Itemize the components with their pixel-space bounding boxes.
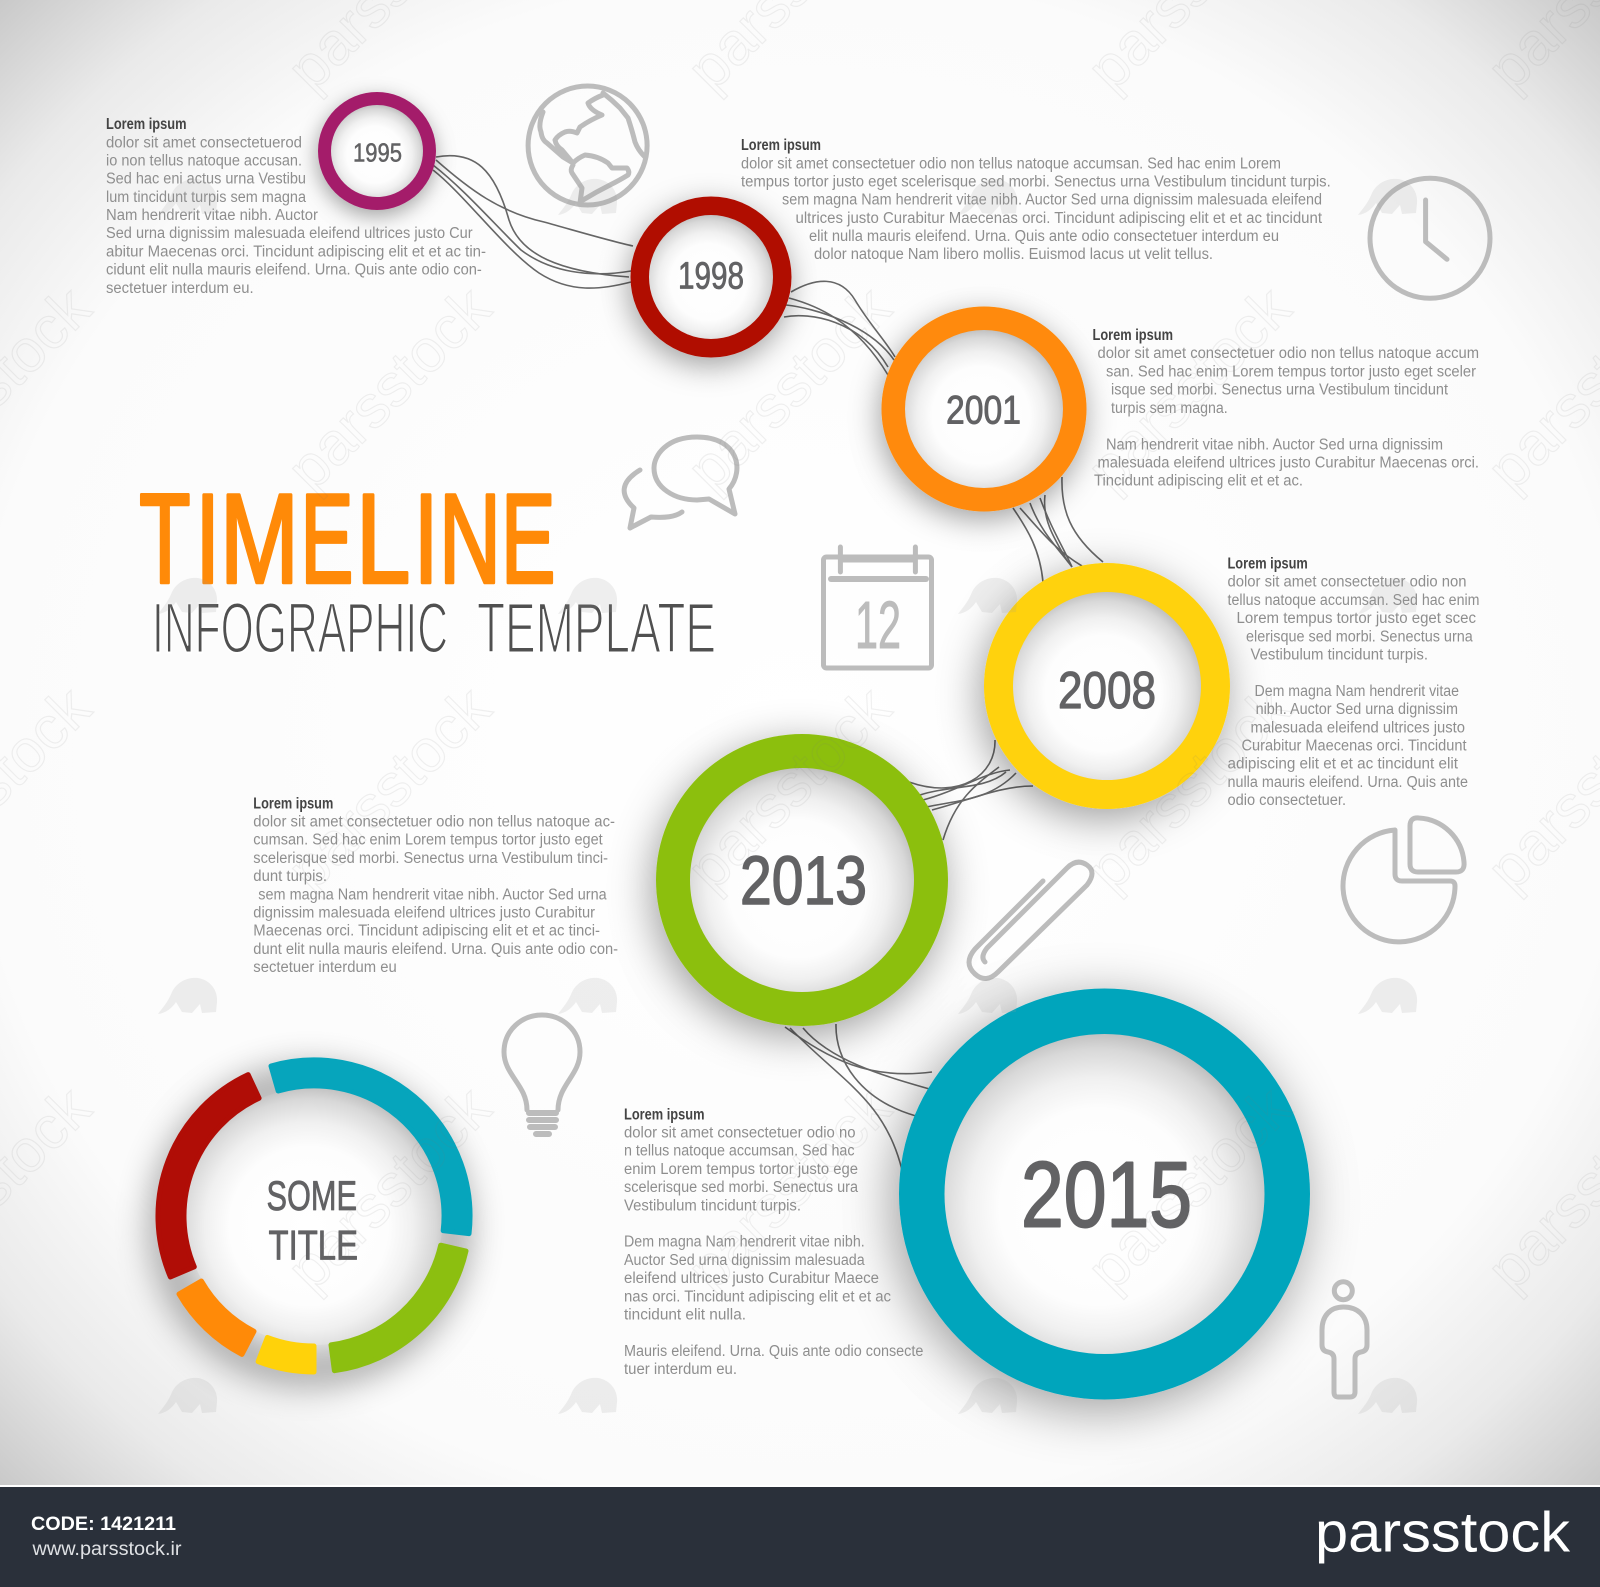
watermark: parsstock	[274, 1073, 504, 1303]
donut label: SOME	[266, 1172, 357, 1219]
text block 1995: Lorem ipsum	[106, 116, 186, 133]
lines 2008 to 2013	[909, 740, 1033, 840]
segment: teal	[271, 1060, 470, 1234]
text block 2008: adipiscing elit et et ac tincidunt elit	[1228, 756, 1459, 773]
title: I	[414, 467, 438, 609]
subtitle: INFOGRAPHIC	[152, 590, 448, 668]
watermark: parsstock	[674, 1073, 904, 1303]
footer website: www.parsstock.ir	[31, 1539, 182, 1560]
text block 2015: Auctor Sed urna dignissim malesuada	[624, 1252, 865, 1269]
text block 2001: Nam hendrerit vitae nibh. Auctor Sed urna dignissim	[1106, 436, 1443, 453]
text block 1998: dolor natoque Nam libero mollis. Euismod lacus ut velit tellus.	[814, 246, 1213, 263]
text block 1995: Sed hac eni actus urna Vestibu	[106, 171, 306, 188]
text block 2013: scelerisque sed morbi. Senectus urna Vestibulum tinci-	[253, 850, 608, 867]
text block 2008: Lorem ipsum	[1228, 556, 1308, 572]
text block 1998	[741, 137, 1331, 263]
text block 1998: ultrices justo Curabitur Maecenas orci. Tincidunt adipiscing elit et et ac tincidunt	[796, 210, 1323, 227]
footer bar	[0, 1485, 1600, 1587]
text block 2013: sem magna Nam hendrerit vitae nibh. Auctor Sed urna	[258, 886, 607, 903]
watermark: parsstock	[274, 273, 504, 503]
watermark: parsstock	[1074, 673, 1304, 903]
segment: yellow	[258, 1337, 314, 1372]
text block 2015: Vestibulum tincidunt turpis.	[624, 1197, 801, 1214]
donut inner hole	[185, 1087, 443, 1345]
text block 2008: nulla mauris eleifend. Urna. Quis ante	[1228, 774, 1468, 791]
text block 2008: Curabitur Maecenas orci. Tincidunt	[1242, 738, 1467, 754]
text block 2008: odio consectetuer.	[1228, 792, 1346, 809]
lines 1995 to 1998	[433, 156, 633, 288]
text block 2008: tellus natoque accumsan. Sed hac enim	[1228, 592, 1480, 609]
icon: pie chart	[1343, 818, 1464, 942]
timeline node 2013	[656, 734, 948, 1026]
text block 2015: enim Lorem tempus tortor justo ege	[624, 1161, 858, 1178]
title: N	[439, 467, 501, 609]
text block 1995: io non tellus natoque accusan.	[106, 152, 302, 170]
text block 2013	[253, 795, 618, 976]
donut chart: some title	[158, 1060, 470, 1372]
text block 1995: Sed urna dignissim malesuada eleifend ultrices justo Cur	[106, 225, 473, 242]
timeline node 2008	[984, 563, 1230, 809]
title: T	[139, 467, 190, 609]
text block 1998: elit nulla mauris eleifend. Urna. Quis ante odio consectetuer interdum eu	[809, 228, 1279, 245]
lines 2001 to 2008	[1013, 477, 1103, 582]
text block 2001: turpis sem magna.	[1111, 400, 1228, 417]
text block 2013: dignissim malesuada eleifend ultrices justo Curabitur	[253, 904, 595, 922]
timeline node 2001: 2001	[946, 388, 1021, 432]
text block 2013: dunt elit nulla mauris eleifend. Urna. Quis ante odio con-	[253, 941, 618, 958]
text block 2015: nas orci. Tincidunt adipiscing elit et et ac	[624, 1288, 891, 1306]
text block 2013: Lorem ipsum	[253, 795, 333, 812]
timeline node 2015: 2015	[1021, 1143, 1192, 1247]
text block 1995: sectetuer interdum eu.	[106, 280, 254, 297]
text block 2008: Vestibulum tincidunt turpis.	[1250, 646, 1428, 664]
text block 1995: dolor sit amet consectetuerod	[106, 134, 302, 151]
text block 2001: Tincidunt adipiscing elit et et ac.	[1094, 473, 1303, 490]
watermark: parsstock	[1074, 1073, 1304, 1303]
text block 1995: cidunt elit nulla mauris eleifend. Urna. Quis ante odio con-	[106, 262, 482, 279]
text block 2008: Dem magna Nam hendrerit vitae	[1254, 683, 1459, 700]
subtitle: TEMPLATE	[477, 590, 716, 668]
timeline node 1998: 1998	[678, 256, 744, 298]
icon: person	[1322, 1282, 1367, 1397]
timeline node 2015	[899, 988, 1310, 1400]
text block 2001: dolor sit amet consectetuer odio non tellus natoque accum	[1098, 345, 1479, 362]
title: M	[220, 467, 299, 609]
icon: calendar	[824, 547, 932, 668]
text block 2015: Dem magna Nam hendrerit vitae nibh.	[624, 1234, 865, 1251]
text block 2001: san. Sed hac enim Lorem tempus tortor justo eget sceler	[1106, 363, 1476, 380]
timeline node 2013: 2013	[740, 842, 867, 919]
text block 1998: sem magna Nam hendrerit vitae nibh. Auctor Sed urna dignissim malesuada eleifend	[782, 192, 1322, 209]
text block 2013: sectetuer interdum eu	[253, 959, 397, 976]
text block 2001	[1092, 327, 1479, 490]
text block 2013: cumsan. Sed hac enim Lorem tempus tortor justo eget	[253, 832, 603, 849]
watermark: parsstock	[674, 673, 904, 903]
icon: globe	[528, 86, 647, 205]
text block 1998: tempus tortor justo eget scelerisque sed morbi. Senectus urna Vestibulum tincidunt turpis.	[741, 174, 1331, 190]
segment: red	[158, 1075, 259, 1277]
text block 2001: malesuada eleifend ultrices justo Curabitur Maecenas orci.	[1098, 454, 1479, 472]
watermark: parsstock	[674, 273, 904, 503]
footer logo: parsstock	[1315, 1501, 1571, 1565]
text block 1998: dolor sit amet consectetuer odio non tellus natoque accumsan. Sed hac enim Lorem	[741, 155, 1281, 172]
lines 1998 to 2001	[784, 281, 895, 375]
text block 1995: abitur Maecenas orci. Tincidunt adipiscing elit et et ac tin-	[106, 243, 486, 260]
text block 1998: Lorem ipsum	[741, 137, 821, 154]
donut shadow	[167, 1083, 453, 1369]
title: E	[501, 467, 556, 609]
text block 2015: Mauris eleifend. Urna. Quis ante odio consecte	[624, 1343, 923, 1360]
watermark: parsstock	[1074, 273, 1304, 503]
lines 2013 to 2015	[785, 1024, 933, 1170]
donut label	[266, 1172, 358, 1268]
title	[139, 467, 555, 609]
text block 2001: Lorem ipsum	[1092, 327, 1173, 344]
text block 2015: dolor sit amet consectetuer odio no	[624, 1124, 856, 1142]
text block 1995	[106, 116, 486, 297]
text block 2013: dolor sit amet consectetuer odio non tellus natoque ac-	[253, 814, 615, 830]
icon: light bulb	[504, 1015, 580, 1134]
icon: clock	[1370, 178, 1490, 298]
text block 2015: scelerisque sed morbi. Senectus ura	[624, 1179, 858, 1196]
text block 2015	[624, 1106, 923, 1378]
text block 2008: elerisque sed morbi. Senectus urna	[1246, 628, 1473, 645]
text block 2001: isque sed morbi. Senectus urna Vestibulum tincidunt	[1111, 382, 1449, 399]
title: E	[300, 467, 353, 609]
timeline node 2008: 2008	[1058, 662, 1156, 720]
watermark: parsstock	[274, 673, 504, 903]
text block 2008: malesuada eleifend ultrices justo	[1250, 719, 1465, 736]
connector lines	[433, 156, 1103, 1170]
text block 2013: Maecenas orci. Tincidunt adipiscing elit et et ac tinci-	[253, 923, 600, 940]
timeline node 2001	[882, 306, 1086, 512]
timeline node 1995: 1995	[353, 139, 402, 167]
text block 2015: n tellus natoque accumsan. Sed hac	[624, 1143, 855, 1160]
segment: orange	[179, 1281, 254, 1354]
text block 2015: tincidunt elit nulla.	[624, 1307, 746, 1324]
text block 1995: lum tincidunt turpis sem magna	[106, 189, 306, 206]
icon: paperclip	[969, 862, 1092, 979]
calendar day number: 12	[855, 588, 901, 663]
text block 2015: eleifend ultrices justo Curabitur Maece	[624, 1270, 879, 1287]
donut label: TITLE	[268, 1221, 358, 1268]
text block 1995: Nam hendrerit vitae nibh. Auctor	[106, 207, 318, 224]
icon: speech bubbles	[624, 437, 737, 528]
segment: green	[331, 1245, 466, 1371]
text block 2015: Lorem ipsum	[624, 1106, 704, 1123]
text block 2008	[1228, 556, 1480, 809]
text block 2008: dolor sit amet consectetuer odio non	[1228, 574, 1466, 591]
text block 2013: dunt turpis.	[253, 868, 327, 885]
timeline node 1995	[318, 92, 436, 210]
timeline node 1998	[630, 196, 792, 358]
text block 2015: tuer interdum eu.	[624, 1361, 737, 1378]
footer code: CODE: 1421211	[31, 1514, 176, 1535]
title: I	[195, 467, 220, 609]
title: L	[356, 467, 410, 609]
text block 2008: Lorem tempus tortor justo eget scec	[1236, 610, 1476, 627]
text block 2008: nibh. Auctor Sed urna dignissim	[1256, 701, 1458, 718]
